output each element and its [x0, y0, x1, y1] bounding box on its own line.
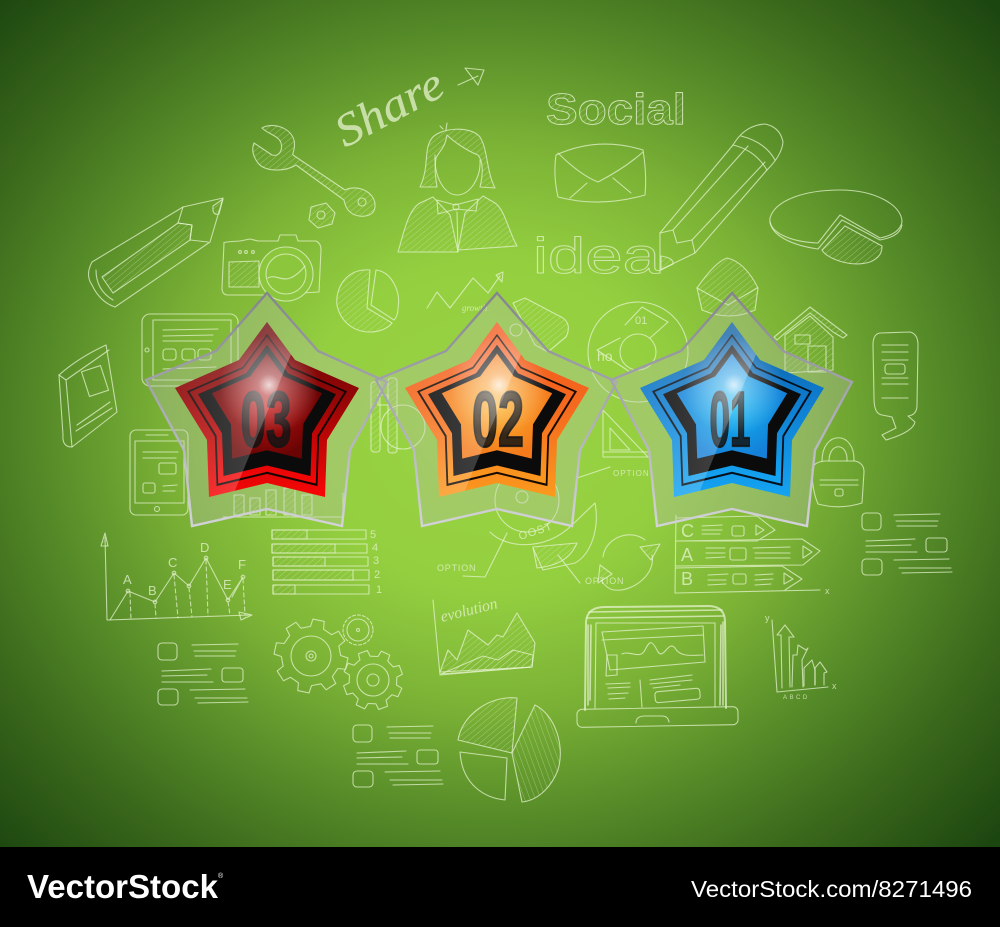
icon: tablet [142, 314, 238, 386]
chart: arrow bars xy: y [765, 613, 770, 623]
star 1 glass and blue badge [611, 293, 852, 526]
chart: line chart A to F: D [200, 540, 209, 555]
icon: segmented disc with options: OPTION [437, 563, 476, 573]
footer registered mark: ® [218, 872, 224, 880]
text block: doodle list right [862, 513, 952, 575]
icon: columns between stars [371, 378, 425, 453]
icon: speech note [873, 332, 918, 440]
text block: doodle list centre [353, 725, 443, 787]
icon: ruler triangle: OPTION [613, 469, 650, 478]
blue badge body: 01 [710, 375, 750, 463]
icon: target disc: ho [597, 348, 613, 364]
chart: progress bars 5 to 1: 5 [370, 529, 376, 541]
footer band [0, 847, 1000, 927]
icon: target disc [588, 302, 688, 402]
icon: envelope [555, 144, 646, 202]
icon: house [774, 307, 847, 373]
footer url text: VectorStock.com/8271496 [691, 876, 972, 902]
star 3 glass and red badge [146, 293, 387, 526]
chart: tag list C A B: B [681, 569, 693, 589]
chart: arrow bars xy: x [832, 681, 837, 691]
icon: pencil left [88, 198, 223, 307]
icon: exploded pie chart [458, 698, 560, 802]
chart: line chart A to F [101, 533, 252, 620]
text: social: Social [546, 85, 686, 134]
icon: camera [222, 235, 321, 301]
orange badge body [405, 322, 589, 497]
chart: line chart A to F: A [123, 572, 132, 587]
chart: progress bars 5 to 1: 3 [373, 555, 379, 567]
icon: small pie chart [337, 270, 399, 332]
icon: segmented disc with options: OPTION [585, 576, 624, 586]
chart: progress bars 5 to 1: 1 [376, 584, 382, 596]
text: share: Share [326, 57, 452, 157]
red badge body [175, 322, 359, 497]
icon: target disc: 01 [635, 315, 647, 327]
chart: line chart A to F: C [168, 555, 177, 570]
chart: evolution area: evolution [439, 595, 499, 626]
chart: line chart A to F: E [223, 577, 232, 592]
chart: tag list C A B [675, 515, 830, 596]
chart: line chart A to F: B [148, 583, 157, 598]
icon: laptop [577, 606, 738, 727]
icon: growth line [427, 272, 503, 313]
chart: progress bars 5 to 1: 4 [372, 542, 378, 554]
chart: tag list C A B: x [825, 586, 830, 596]
star 2 glass and orange badge [376, 293, 617, 526]
blue badge body [640, 322, 824, 497]
icon: segmented disc with options [437, 468, 624, 586]
icon: book [59, 345, 117, 447]
icon: lock [812, 438, 864, 507]
chart: progress bars 5 to 1: 2 [374, 569, 380, 581]
chart: arrow bars xy [765, 613, 837, 701]
icon: hatched gem [697, 258, 758, 316]
icon: wrench [253, 125, 375, 216]
glass star outline [146, 293, 387, 526]
icon: smartphone [130, 430, 188, 515]
chart: line chart A to F: F [238, 557, 246, 572]
icon: bar chart behind star 3 [223, 488, 343, 517]
icon: gears [268, 613, 412, 719]
text: idea: idea [533, 228, 660, 284]
number 03: 03 [240, 375, 292, 463]
chart: tag list C A B: C [681, 521, 694, 541]
icon: growth line: growth [462, 303, 488, 313]
icon: cycle arrows [598, 535, 660, 590]
number 02: 02 [472, 375, 524, 463]
text block: doodle list left [158, 643, 248, 705]
sketch doodles [59, 57, 952, 802]
chart: progress bars 5 to 1 [272, 529, 382, 596]
icon: 3D pie chart [770, 190, 902, 264]
icon: ruler triangle [577, 410, 650, 478]
chart: arrow bars xy: ABCD [783, 695, 810, 701]
icon: big pencil [660, 124, 783, 270]
icon: segmented disc with options: OOST [517, 521, 554, 543]
icon: tilted phone [510, 298, 568, 352]
glass star outline [376, 293, 617, 526]
icon: woman portrait [398, 123, 517, 252]
glass star outline [611, 293, 852, 526]
chart: tag list C A B: A [681, 545, 693, 565]
chart: evolution area [433, 595, 535, 675]
icon: hex nut [309, 203, 335, 228]
footer logo text: VectorStock [27, 868, 219, 905]
